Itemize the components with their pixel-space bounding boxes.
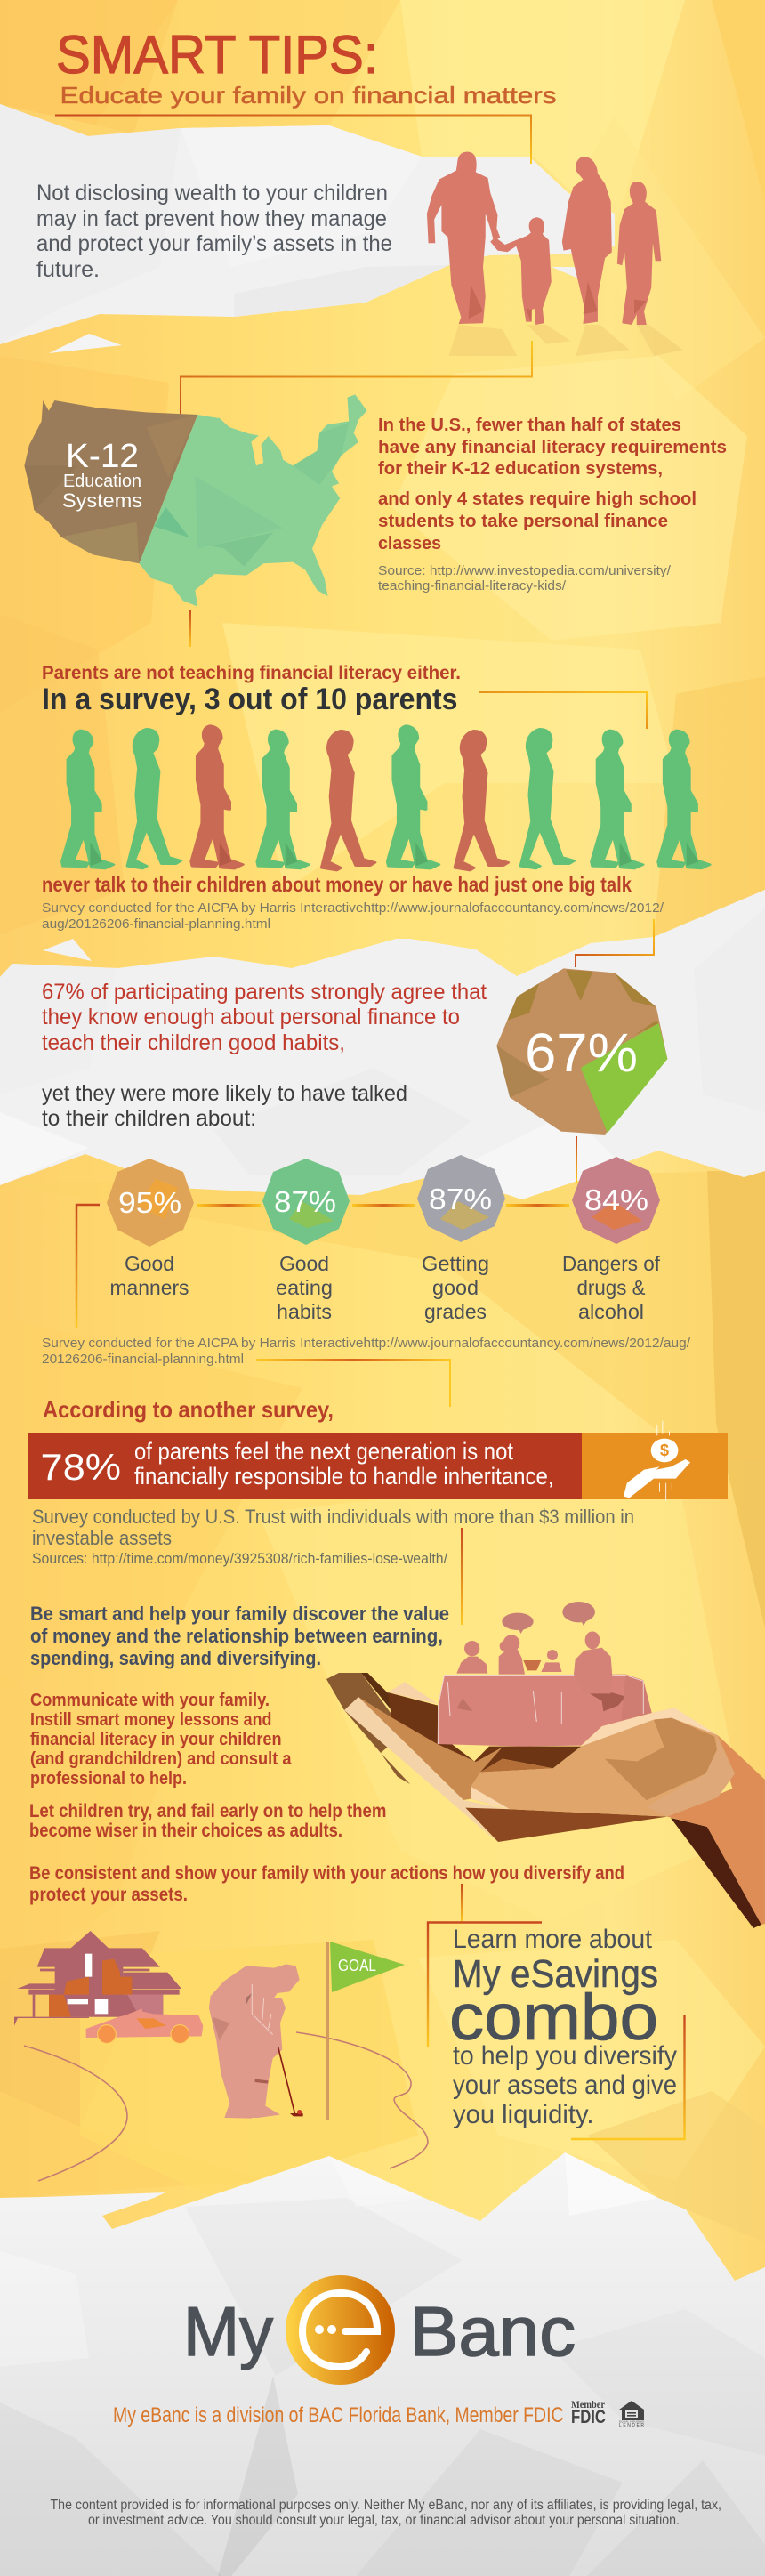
text block: wealth disclosure <box>36 181 392 282</box>
logo: My eBanc: Banc <box>410 2292 576 2370</box>
text block: be consistent <box>29 1863 624 1905</box>
text block: communicate with your family: financial literacy in your children <box>30 1730 281 1749</box>
panel: white band behind family text <box>0 104 615 353</box>
arrow: connector to 67% gem <box>576 919 654 967</box>
call to action text: Learn more about <box>453 1925 653 1954</box>
text: parents feel: financially responsible to handle inheritance, <box>134 1463 554 1490</box>
text block: 67% of parents agree: 67% of participating parents strongly agree that <box>42 980 487 1005</box>
map label: K-12 Education Systems: Systems <box>62 489 142 512</box>
text block: let children try <box>29 1801 386 1841</box>
arrow: connector to call to action <box>461 1884 463 1922</box>
labels: topic names under badges: good <box>432 1276 479 1299</box>
illustration: house and car <box>14 1931 203 2043</box>
illustration: golfers <box>209 1964 303 2119</box>
text block: 67% of parents agree: they know enough about personal finance to <box>42 1005 460 1030</box>
illustration: winding path lines <box>24 2032 428 2181</box>
icon: hand holding coin <box>624 1421 690 1501</box>
text block: wealth disclosure: may in fact prevent how they manage <box>36 206 387 231</box>
badge: 84% dangers of drugs and alcohol: 84% <box>584 1183 648 1216</box>
title: SMART TIPS: <box>56 25 378 85</box>
source: AICPA survey <box>42 900 664 932</box>
source: U.S. Trust survey: Survey conducted by U.S. Trust with individuals with more than $3 million in <box>32 1506 634 1528</box>
text block: U.S. financial literacy requirements: students to take personal finance <box>378 512 668 531</box>
icon: FDIC member mark: FDIC <box>571 2407 606 2427</box>
text block: yet they talked about: to their children about: <box>42 1106 256 1131</box>
labels: topic names under badges: drugs & <box>576 1276 646 1299</box>
label: 67%: 67% <box>525 1022 638 1083</box>
badge: 87% good eating habits <box>262 1159 350 1245</box>
call to action text: you liquidity. <box>453 2100 594 2129</box>
text block: communicate with your family: professional to help. <box>30 1769 187 1789</box>
chart: 10 parents pictogram, 3 highlighted <box>62 726 710 870</box>
text block: U.S. financial literacy requirements: classes <box>378 534 441 553</box>
icon: goal flag <box>326 1942 405 2120</box>
text block: let children try: Let children try, and fail early on to help them <box>29 1801 386 1821</box>
icon: FDIC member mark <box>571 2398 606 2427</box>
icon: hand holding coin: $ <box>660 1441 669 1459</box>
icon: goal flag: GOAL <box>338 1957 376 1974</box>
text block: be smart: Be smart and help your family discover the value <box>30 1603 449 1625</box>
icon: equal housing lender <box>619 2401 645 2428</box>
labels: topic names under badges: habits <box>277 1300 332 1323</box>
text block: 67% of parents agree <box>42 980 487 1055</box>
labels: topic names under badges: manners <box>110 1276 189 1299</box>
labels: topic names under badges: Good <box>125 1252 174 1275</box>
icon: equal housing lender: EQUAL HOUSING <box>619 2420 645 2424</box>
family at table <box>456 1631 612 1693</box>
text block: U.S. financial literacy requirements: for their K-12 education systems, <box>378 459 663 479</box>
speech bubbles <box>502 1602 595 1634</box>
text block: be consistent: Be consistent and show your family with your actions how you diversify and <box>29 1863 624 1884</box>
heading: 3 out of 10 parents: In a survey, 3 out of 10 parents <box>42 682 457 716</box>
source: U.S. Trust survey: investable assets <box>32 1527 172 1549</box>
text block: communicate with your family <box>30 1691 292 1789</box>
chart: 67% polygon pie <box>496 968 667 1135</box>
labels: topic names under badges: grades <box>424 1300 487 1323</box>
text block: be smart: spending, saving and diversifying. <box>30 1647 321 1669</box>
logo: My eBanc: My <box>183 2292 273 2370</box>
call to action text: combo <box>449 1982 658 2054</box>
source: AICPA survey second: Survey conducted for the AICPA by Harris Interactivehttp://www.journalofaccountancy.com/news/2012/aug/ <box>42 1336 691 1351</box>
panel: white band behind 67% section <box>0 890 765 1199</box>
text block: communicate with your family: Instill smart money lessons and <box>30 1710 272 1730</box>
text block: communicate with your family: (and grandchildren) and consult a <box>30 1749 292 1769</box>
call to action text: My eSavings <box>453 1952 658 1996</box>
labels: topic names under badges: Getting <box>422 1252 489 1275</box>
arrow: connector from 67% gem to row <box>576 1136 577 1183</box>
text block: U.S. financial literacy requirements: In the U.S., fewer than half of states <box>378 416 681 435</box>
illustration: family silhouettes <box>427 152 683 356</box>
text: legal disclaimer <box>50 2498 721 2528</box>
text block: yet they talked about <box>42 1081 407 1131</box>
badge: 95% good manners <box>107 1159 194 1247</box>
source: U.S. Trust survey <box>32 1506 634 1567</box>
badge: 87% getting good grades <box>417 1155 505 1242</box>
heading: parents not teaching: Parents are not teaching financial literacy either. <box>42 663 461 683</box>
car <box>86 2008 203 2038</box>
text block: 67% of parents agree: teach their children good habits, <box>42 1030 345 1055</box>
map label: K-12 Education Systems: K-12 <box>66 438 139 475</box>
text: never talk to children: never talk to their children about money or have had just one big talk <box>42 873 632 896</box>
source: investopedia: teaching-financial-literacy-kids/ <box>378 578 567 594</box>
source: AICPA survey: Survey conducted for the AICPA by Harris Interactivehttp://www.journalofaccountancy.com/news/2012/ <box>42 900 664 916</box>
subtitle: Educate your family on financial matters <box>60 82 557 109</box>
arrow: connector from title to family <box>55 116 531 164</box>
labels: topic names under badges: eating <box>276 1276 333 1299</box>
badge: 87% getting good grades: 87% <box>429 1183 492 1215</box>
frame: call to action bracket <box>428 1922 685 2139</box>
heading: according to another survey: According to another survey, <box>43 1396 334 1423</box>
source: AICPA survey second: 20126206-financial-planning.html <box>42 1352 244 1367</box>
arrow: connector to family tips <box>461 1528 463 1625</box>
text: legal disclaimer: The content provided is for informational purposes only. Neither My eBanc, nor any of its affiliates, is providing legal, tax, <box>50 2498 721 2513</box>
call to action text <box>449 1925 677 2129</box>
text: legal disclaimer: or investment advice. You should consult your legal, tax, or financial advisor about your personal situation. <box>88 2513 680 2528</box>
arrow: connector from family to map <box>181 341 532 414</box>
text block: U.S. financial literacy requirements: have any financial literacy requirements <box>378 438 727 457</box>
call to action text: to help you diversify <box>453 2041 677 2071</box>
text block: be smart: of money and the relationship between earning, <box>30 1625 443 1647</box>
logo: My eBanc <box>183 2275 576 2385</box>
badge: 95% good manners: 95% <box>118 1186 181 1219</box>
labels: topic names under badges: alcohol <box>578 1300 644 1323</box>
badge: 84% dangers of drugs and alcohol <box>572 1157 660 1244</box>
panel: grey footer background <box>0 2152 765 2576</box>
source: investopedia: Source: http://www.investopedia.com/university/ <box>378 563 672 578</box>
text block: be smart <box>30 1603 449 1669</box>
labels: topic names under badges <box>110 1252 661 1323</box>
illustration: hand holding family table <box>326 1602 765 1928</box>
text block: communicate with your family: Communicate with your family. <box>30 1691 270 1710</box>
map: U.S. K-12 education systems <box>24 394 366 607</box>
text block: wealth disclosure: future. <box>36 257 100 282</box>
text: parents feel <box>134 1438 554 1490</box>
text block: let children try: become wiser in their choices as adults. <box>29 1821 342 1841</box>
arrow: connector to another survey <box>256 1360 450 1407</box>
labels: topic names under badges: Good <box>279 1252 329 1275</box>
source: U.S. Trust survey: Sources: http://time.com/money/3925308/rich-families-lose-wealth/ <box>32 1550 447 1567</box>
map label: K-12 Education Systems: Education <box>63 472 141 491</box>
call to action text: your assets and give <box>453 2071 677 2100</box>
text block: wealth disclosure: and protect your family’s assets in the <box>36 231 392 256</box>
arrow: connector map to survey <box>189 610 191 647</box>
labels: topic names under badges: Dangers of <box>562 1252 661 1275</box>
icon: FDIC member mark: Member <box>571 2398 606 2410</box>
table <box>438 1675 652 1747</box>
arrow: connectors between topic gems <box>76 1204 569 1328</box>
text: division statement: My eBanc is a division of BAC Florida Bank, Member FDIC <box>113 2403 564 2427</box>
badge: 87% good eating habits: 87% <box>274 1185 336 1218</box>
text: parents feel: of parents feel the next generation is not <box>134 1438 513 1465</box>
icon: equal housing lender: LENDER <box>619 2423 644 2428</box>
text block: wealth disclosure: Not disclosing wealth to your children <box>36 181 388 206</box>
source: AICPA survey: aug/20126206-financial-planning.html <box>42 917 270 932</box>
hand <box>326 1673 765 1928</box>
text block: U.S. financial literacy requirements <box>378 416 727 553</box>
map label: K-12 Education Systems <box>62 438 142 512</box>
text block: be consistent: protect your assets. <box>29 1885 188 1905</box>
arrow: connector survey to walkers <box>479 692 647 729</box>
text block: U.S. financial literacy requirements: and only 4 states require high school <box>378 489 697 509</box>
panel: 78% banner <box>28 1421 728 1501</box>
text block: yet they talked about: yet they were more likely to have talked <box>42 1081 407 1106</box>
source: AICPA survey second <box>42 1336 691 1367</box>
stat: 78%: 78% <box>41 1446 121 1488</box>
source: investopedia <box>378 563 672 594</box>
